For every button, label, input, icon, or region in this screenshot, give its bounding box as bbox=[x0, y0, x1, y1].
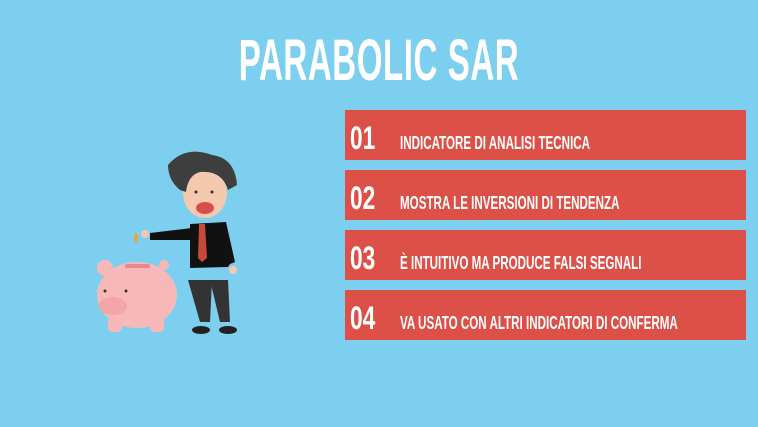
item 02: 02 bbox=[350, 180, 375, 216]
icon: piggy bank bbox=[97, 260, 177, 332]
item 04: 04 bbox=[350, 300, 375, 336]
item 03 bbox=[345, 230, 746, 280]
item 01: 01 bbox=[350, 120, 375, 156]
item 01 bbox=[345, 110, 746, 160]
item 04 bbox=[345, 290, 746, 340]
item 04: VA USATO CON ALTRI INDICATORI DI CONFERMA bbox=[400, 313, 678, 333]
item 03: 03 bbox=[350, 240, 375, 276]
item 01: INDICATORE DI ANALISI TECNICA bbox=[400, 133, 590, 153]
icon: businessman bbox=[134, 152, 237, 334]
item 03: È INTUITIVO MA PRODUCE FALSI SEGNALI bbox=[400, 253, 641, 273]
item 02: MOSTRA LE INVERSIONI DI TENDENZA bbox=[400, 193, 620, 213]
title: PARABOLIC SAR bbox=[239, 28, 519, 93]
item 02 bbox=[345, 170, 746, 220]
